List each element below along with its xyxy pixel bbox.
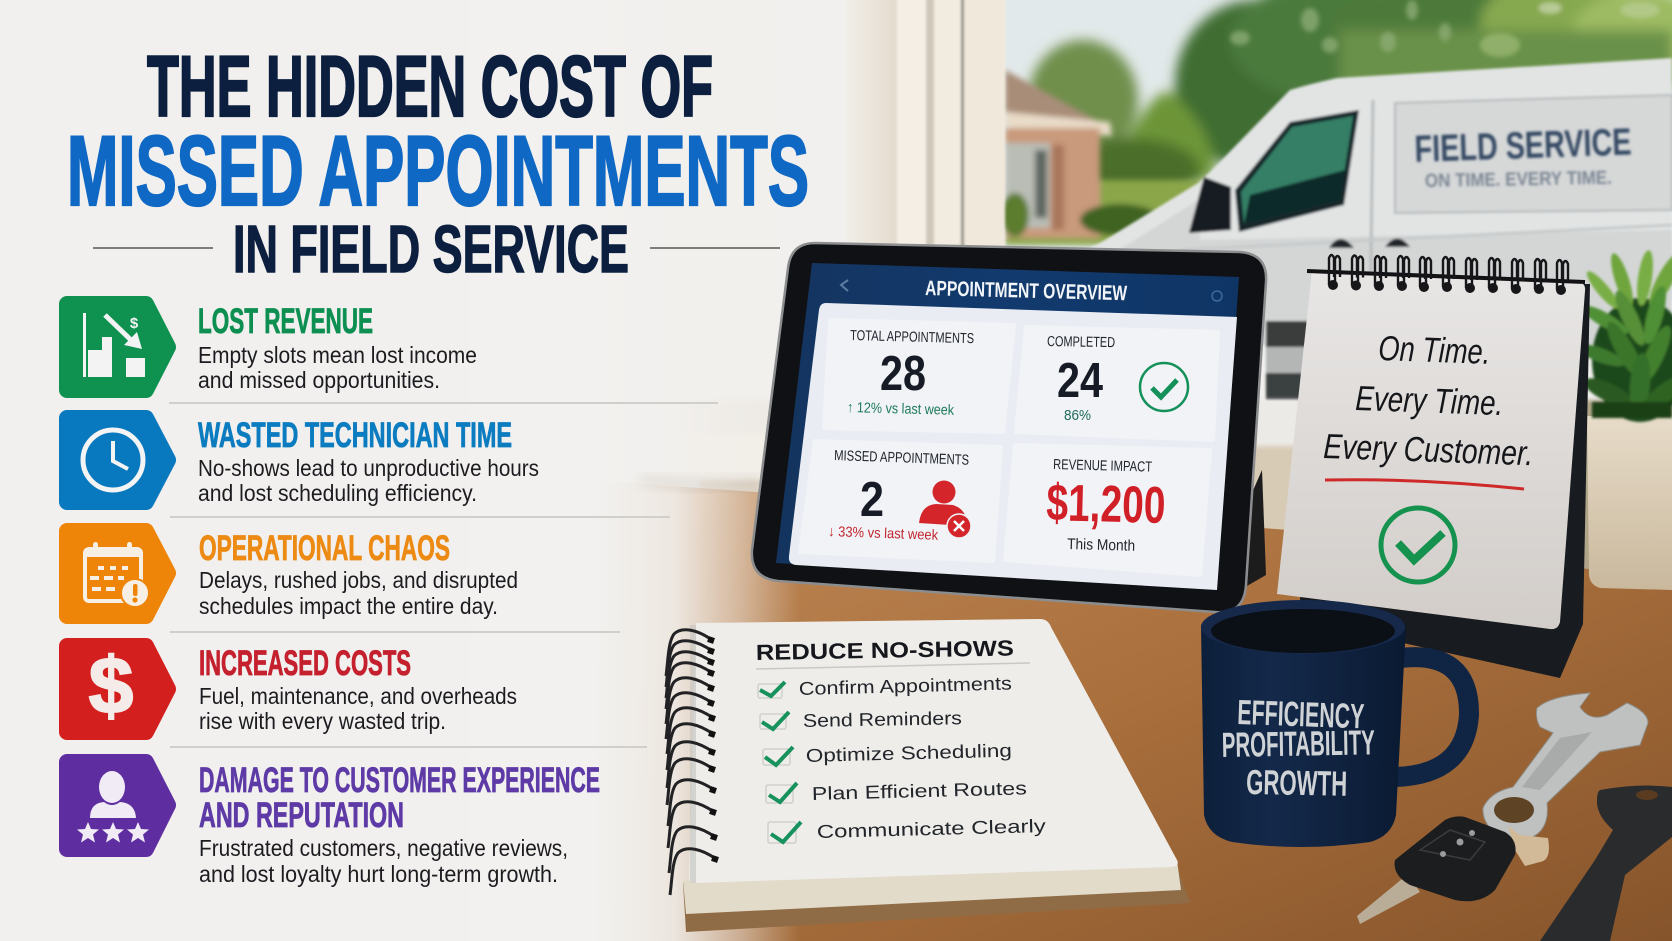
card: total appointments: TOTAL APPOINTMENTS xyxy=(850,328,974,347)
fade from left panel into the photo xyxy=(470,0,800,941)
checklist xyxy=(799,672,1047,842)
mug text xyxy=(1221,693,1375,804)
heading: WASTED TECHNICIAN TIME xyxy=(198,416,512,455)
title: THE HIDDEN COST OF xyxy=(147,39,713,135)
notebook cover and page block xyxy=(683,867,1190,932)
header icons xyxy=(841,280,848,291)
leaves xyxy=(1573,249,1672,422)
pot xyxy=(1587,416,1672,590)
card: missed appointments: 2 xyxy=(860,473,884,527)
key ring tag xyxy=(1508,826,1549,866)
card: completed: COMPLETED xyxy=(1047,334,1115,351)
item: wasted technician time xyxy=(67,416,539,506)
desk calendar xyxy=(1277,255,1590,678)
key blade xyxy=(1357,874,1420,924)
icon: customer with stars xyxy=(67,762,168,849)
item: lost revenue xyxy=(67,302,477,393)
card: missed appointments: ↓ 33% vs last week xyxy=(828,524,939,544)
checklist: Communicate Clearly xyxy=(817,815,1047,842)
item: increased costs xyxy=(67,641,517,734)
tablet screen xyxy=(776,263,1239,590)
icon: falling bar chart xyxy=(67,304,168,390)
background: window sill xyxy=(680,400,1672,590)
calendar message: On Time. xyxy=(1378,329,1491,372)
mug text: EFFICIENCY xyxy=(1237,693,1365,736)
checklist: Optimize Scheduling xyxy=(806,740,1012,766)
heading: AND REPUTATION xyxy=(199,796,404,835)
wrench xyxy=(1483,693,1648,838)
calendar stand xyxy=(1300,284,1590,678)
icon: falling bar chart: $ xyxy=(130,315,139,332)
checkboxes xyxy=(758,684,796,843)
card: missed appointments xyxy=(800,441,1001,561)
header title: APPOINTMENT OVERVIEW xyxy=(925,277,1128,305)
mug handle xyxy=(1395,657,1469,777)
heading: LOST REVENUE xyxy=(198,302,373,341)
card: missed appointments: MISSED APPOINTMENTS xyxy=(834,448,969,469)
mug text: PROFITABILITY xyxy=(1221,723,1375,765)
car keys xyxy=(1357,816,1549,924)
description: and lost loyalty hurt long-term growth. xyxy=(199,861,558,887)
spiral binding xyxy=(666,630,718,895)
card: revenue impact: This Month xyxy=(1067,536,1135,555)
sill shadow xyxy=(640,474,760,492)
key fob xyxy=(1395,816,1516,901)
tablet xyxy=(752,243,1266,612)
calendar message xyxy=(1323,329,1534,473)
card: completed: 24 xyxy=(1057,354,1103,408)
checklist: Plan Efficient Routes xyxy=(812,777,1027,804)
card: completed xyxy=(1016,327,1218,440)
heading: DAMAGE TO CUSTOMER EXPERIENCE xyxy=(199,761,600,800)
icon: missed person xyxy=(919,480,971,538)
icon: dollar sign: $ xyxy=(89,641,133,730)
heading: OPERATIONAL CHAOS xyxy=(199,529,450,568)
calendar rings xyxy=(1328,255,1568,295)
card: total appointments xyxy=(824,320,1014,432)
mug body xyxy=(1201,625,1406,847)
item: damage to customer experience xyxy=(67,761,600,887)
title: MISSED APPOINTMENTS xyxy=(67,115,809,226)
notebook heading: REDUCE NO-SHOWS xyxy=(756,636,1014,665)
description: No-shows lead to unproductive hours xyxy=(198,455,539,481)
description: rise with every wasted trip. xyxy=(199,708,446,734)
icon: clock xyxy=(67,418,168,502)
description: and missed opportunities. xyxy=(198,367,440,393)
tree highlights xyxy=(1230,0,1660,57)
checkmarks xyxy=(760,682,801,842)
icon: calendar alert xyxy=(67,531,168,616)
checklist: Send Reminders xyxy=(803,707,962,731)
title xyxy=(67,39,809,287)
description: schedules impact the entire day. xyxy=(199,593,498,619)
tablet stand xyxy=(1240,470,1266,590)
description: Fuel, maintenance, and overheads xyxy=(199,683,517,709)
tablet body xyxy=(752,243,1266,612)
background: window view with trees, house and sky xyxy=(1001,0,1672,300)
checklist: Confirm Appointments xyxy=(799,672,1012,699)
van lettering: field service: ON TIME. EVERY TIME. xyxy=(1425,168,1612,192)
card: revenue impact: $1,200 xyxy=(1046,474,1166,535)
title: IN FIELD SERVICE xyxy=(233,212,629,287)
card: total appointments: ↑ 12% vs last week xyxy=(847,400,955,419)
item: operational chaos xyxy=(67,529,518,619)
icon: green check xyxy=(1381,508,1455,582)
heading: INCREASED COSTS xyxy=(199,644,411,683)
card: revenue impact xyxy=(1005,445,1210,575)
background: wooden desk xyxy=(560,478,1672,941)
van lettering: field service xyxy=(1414,121,1632,192)
plant in pot xyxy=(1573,249,1672,590)
description: Empty slots mean lost income xyxy=(198,342,477,368)
mug text: GROWTH xyxy=(1246,763,1348,804)
red underline xyxy=(1325,480,1524,489)
card: completed: 86% xyxy=(1064,408,1091,424)
black tool handle xyxy=(1540,786,1672,941)
card: revenue impact: REVENUE IMPACT xyxy=(1053,457,1152,476)
description: Frustrated customers, negative reviews, xyxy=(199,835,568,861)
calendar page xyxy=(1277,271,1585,629)
background: blurred service van xyxy=(1060,58,1672,400)
card: total appointments: 28 xyxy=(880,347,926,401)
notebook xyxy=(666,619,1190,932)
calendar message: Every Time. xyxy=(1355,379,1504,423)
coffee mug xyxy=(1201,600,1469,847)
icon: dollar sign xyxy=(67,641,168,732)
calendar message: Every Customer. xyxy=(1323,427,1534,473)
screen panel xyxy=(789,303,1237,590)
description: and lost scheduling efficiency. xyxy=(198,480,477,506)
description: Delays, rushed jobs, and disrupted xyxy=(199,567,518,593)
background: window frame xyxy=(846,0,1005,260)
notebook page xyxy=(689,619,1178,883)
